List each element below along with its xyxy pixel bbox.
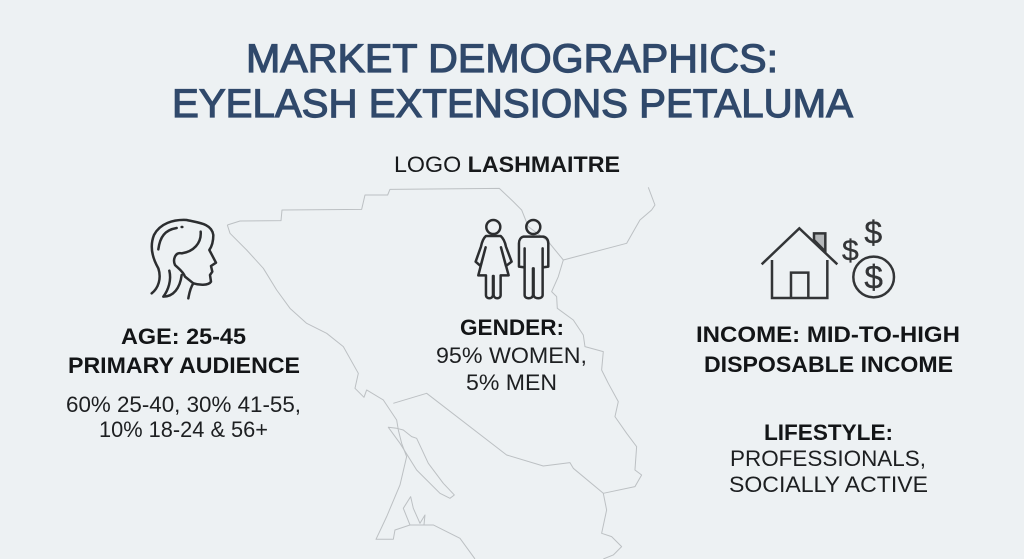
- text block: age: AGE: 25-45: [121, 324, 246, 349]
- text block: lifestyle: LIFESTYLE:: [764, 420, 893, 445]
- title: [172, 37, 853, 126]
- background map outline: [227, 187, 655, 559]
- text block: age: PRIMARY AUDIENCE: [68, 353, 300, 378]
- text block: gender: 5% MEN: [466, 370, 557, 395]
- text block: gender: [436, 315, 587, 395]
- text block: lifestyle: SOCIALLY ACTIVE: [729, 472, 928, 497]
- logo text: LOGO LASHMAITRE: [394, 152, 620, 177]
- text block: lifestyle: [729, 420, 928, 497]
- text block: gender: 95% WOMEN,: [436, 343, 587, 368]
- text block: age: [66, 324, 301, 442]
- title: MARKET DEMOGRAPHICS:: [246, 37, 778, 81]
- text block: income: INCOME: MID-TO-HIGH: [696, 322, 960, 347]
- icon: woman head profile: [152, 220, 216, 298]
- text block: income: DISPOSABLE INCOME: [704, 352, 953, 377]
- icon: small dollar top: $: [864, 214, 882, 250]
- icon: house: [762, 228, 837, 298]
- text block: age: 10% 18-24 & 56+: [99, 417, 268, 442]
- title: EYELASH EXTENSIONS PETALUMA: [172, 82, 853, 126]
- icon: man figure: [519, 220, 548, 298]
- text block: gender: GENDER:: [460, 315, 564, 340]
- text block: lifestyle: PROFESSIONALS,: [730, 446, 926, 471]
- icon: woman and man figures: [476, 220, 548, 298]
- icon: small dollar left: $: [842, 234, 859, 267]
- text block: income: [696, 322, 960, 377]
- text block: age: 60% 25-40, 30% 41-55,: [66, 392, 301, 417]
- icon: coin with dollar: $: [864, 259, 883, 296]
- icon: woman figure: [476, 220, 512, 298]
- icon: house with dollar signs: [762, 214, 894, 298]
